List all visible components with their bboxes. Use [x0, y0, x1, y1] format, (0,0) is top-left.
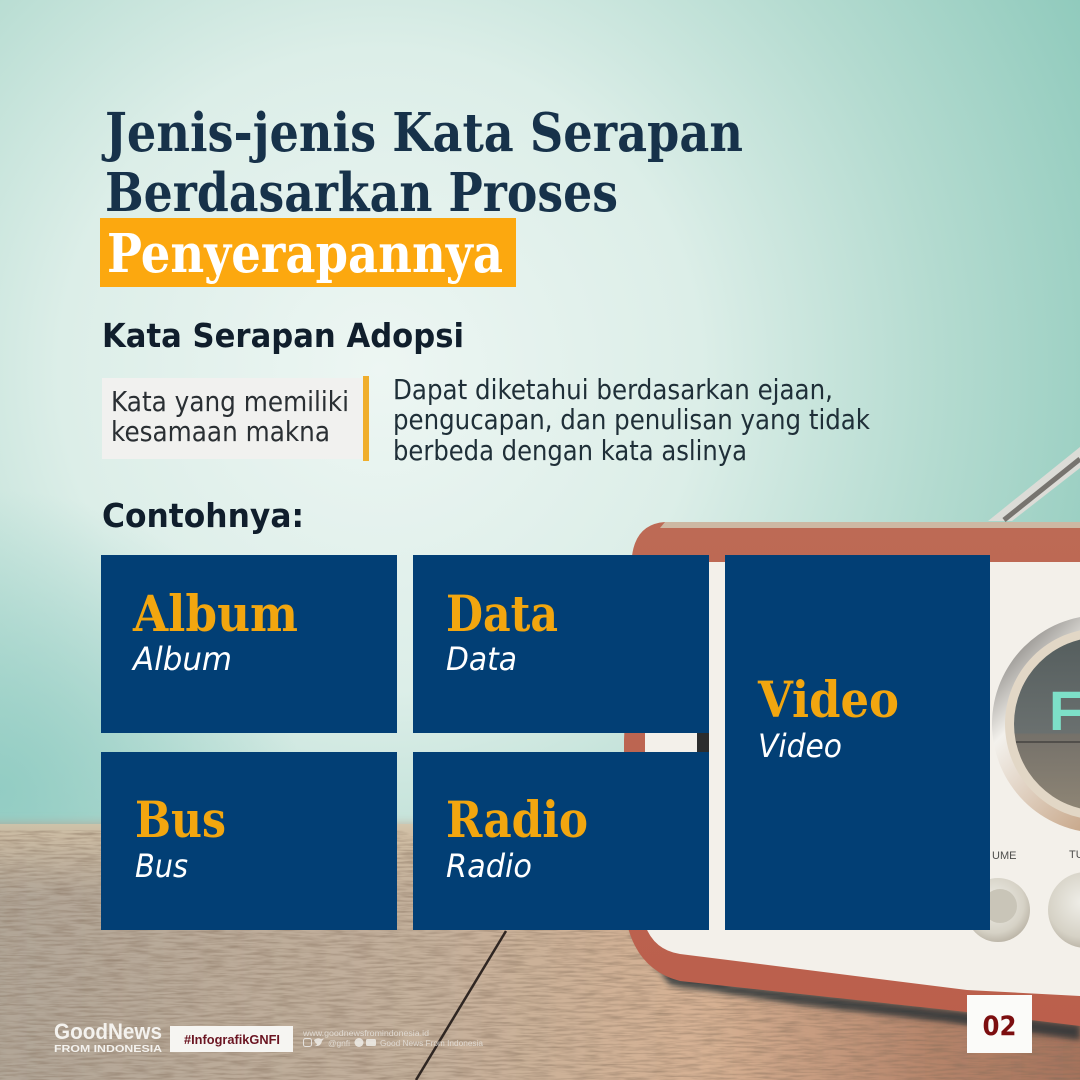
description text: berbeda dengan kata aslinya	[393, 435, 747, 467]
radio inner detail	[697, 733, 709, 752]
background: teal sky	[0, 0, 1080, 840]
radio antenna	[988, 447, 1080, 521]
footer logo: GoodNews From Indonesia	[54, 1019, 162, 1055]
card: Radio: Radio	[446, 790, 588, 849]
card: Video	[725, 555, 990, 930]
footer logo: GoodNews From Indonesia: GoodNews	[54, 1019, 162, 1044]
divider bar	[363, 376, 369, 461]
radio knobs	[966, 872, 1080, 948]
page number: 02	[982, 1011, 1016, 1042]
icon: twitter	[314, 1038, 324, 1046]
footer social links: www.goodnewsfromindonesia.id	[302, 1029, 429, 1038]
heading: Contohnya: Contohnya:	[102, 496, 304, 535]
radio white face	[645, 562, 1080, 996]
card: Bus: Bus	[135, 847, 188, 885]
title: Jenis-jenis Kata Serapan	[102, 102, 743, 164]
description text	[393, 374, 870, 467]
card: Radio	[413, 752, 709, 930]
description text: pengucapan, dan penulisan yang tidak	[393, 404, 870, 436]
definition box: Kata yang memiliki	[111, 386, 349, 418]
footer social links	[302, 1029, 484, 1048]
footer social links: @gnfi	[328, 1039, 350, 1048]
description text: Dapat diketahui berdasarkan ejaan,	[393, 374, 833, 406]
card: Radio: Radio	[446, 847, 532, 885]
card: Data	[413, 555, 709, 733]
card: Bus	[101, 752, 397, 930]
card: Video: Video	[758, 727, 842, 765]
card: Bus: Bus	[135, 790, 226, 849]
card: Data: Data	[446, 584, 558, 643]
radio shadow	[630, 930, 1080, 1040]
title highlight: Penyerapannya	[107, 223, 503, 285]
title: Berdasarkan Proses	[105, 162, 618, 224]
definition box	[102, 378, 363, 459]
icon: youtube	[366, 1039, 376, 1046]
card: Album: Album	[131, 640, 232, 678]
title	[100, 102, 743, 287]
icon: instagram	[304, 1038, 312, 1046]
card: Album: Album	[132, 584, 298, 643]
icon: facebook	[354, 1038, 364, 1047]
background: wooden table	[0, 824, 1080, 1080]
definition box: kesamaan makna	[111, 416, 330, 448]
card: Data: Data	[446, 640, 517, 678]
card: Album	[101, 555, 397, 733]
card: Video: Video	[757, 670, 899, 729]
radio dial	[992, 615, 1080, 833]
footer logo: GoodNews From Indonesia: FROM INDONESIA	[54, 1043, 162, 1055]
heading: Kata Serapan Adopsi: Kata Serapan Adopsi	[102, 316, 464, 355]
radio labels	[992, 849, 1080, 862]
radio wooden shell	[624, 522, 1080, 1026]
radio labels: UME	[992, 850, 1016, 862]
footer hashtag: #InfografikGNFI	[184, 1032, 280, 1047]
footer social links: Good News From Indonesia	[380, 1039, 484, 1048]
footer hashtag	[170, 1026, 293, 1052]
illustration: vintage radio	[624, 447, 1080, 1040]
page number	[967, 995, 1032, 1053]
